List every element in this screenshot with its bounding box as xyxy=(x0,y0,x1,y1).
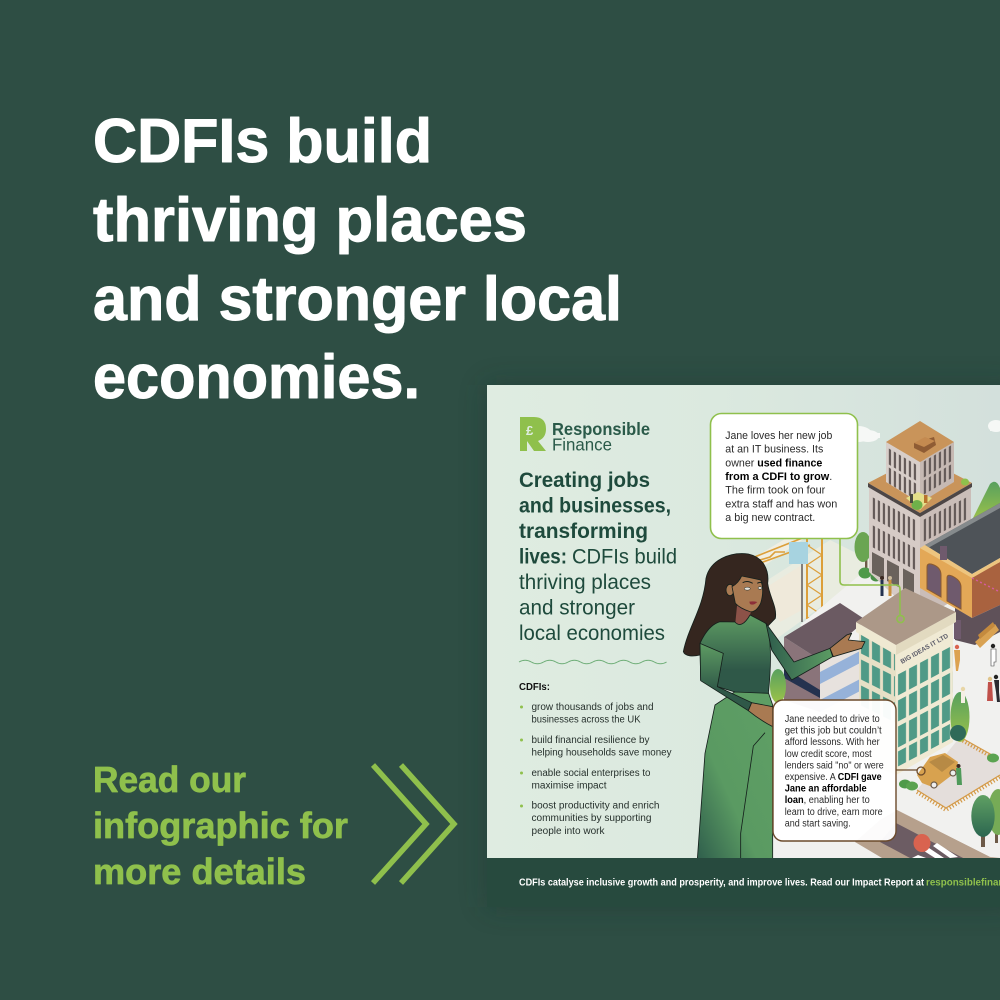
list items xyxy=(532,702,672,837)
terrace xyxy=(868,456,972,513)
list items: enable social enterprises to xyxy=(532,768,651,779)
connector: lower callout to car xyxy=(896,767,925,775)
title: economies. xyxy=(93,343,420,412)
panel heading: and stronger xyxy=(519,596,635,620)
logo pound sign: £ xyxy=(526,423,534,438)
upper block xyxy=(886,442,920,496)
list items: boost productivity and enrich xyxy=(532,800,660,812)
bench xyxy=(975,622,999,648)
panel heading xyxy=(519,469,677,645)
neck and face xyxy=(726,576,763,625)
roof terrace figures xyxy=(906,492,932,510)
callout text: lenders said "no" or were xyxy=(785,760,884,771)
callout text: learn to drive, earn more xyxy=(785,807,883,818)
title: and stronger local xyxy=(93,265,622,334)
wavy divider xyxy=(519,660,667,664)
panel background xyxy=(487,385,1000,858)
logo: Responsible Finance xyxy=(520,417,650,454)
callout text xyxy=(725,430,837,524)
panel heading: Creating jobs xyxy=(519,469,650,492)
list heading: CDFIs: xyxy=(519,682,550,693)
tree left of tower xyxy=(854,532,878,582)
hair xyxy=(683,554,776,656)
top xyxy=(700,615,770,693)
logo: Responsible Finance: Finance xyxy=(552,434,612,454)
callout box xyxy=(710,414,858,538)
callout box xyxy=(773,700,896,841)
connector: top callout to IT building xyxy=(840,539,904,623)
call to action text: Read our xyxy=(93,759,246,800)
footer band xyxy=(487,858,1000,907)
call to action text xyxy=(93,759,348,892)
panel heading: transforming xyxy=(519,520,648,543)
panel heading: lives: xyxy=(519,546,567,568)
road and kerb xyxy=(855,810,1000,862)
title xyxy=(93,107,622,412)
panel heading: CDFIs build xyxy=(572,546,677,568)
skirt fold line xyxy=(741,733,765,859)
callout text: extra staff and has won xyxy=(725,498,837,510)
icon: double chevron arrow xyxy=(373,765,454,883)
hand on hip xyxy=(748,703,773,727)
car with Jane xyxy=(917,753,962,788)
callout text: The firm took on four xyxy=(725,485,826,497)
callout text: Jane needed to drive to xyxy=(785,714,880,725)
lower block xyxy=(869,488,947,606)
callout text: get this job but couldn’t xyxy=(785,726,882,737)
people xyxy=(880,576,1000,703)
callout text xyxy=(785,714,884,829)
callout text: expensive. A CDFI gave xyxy=(785,772,882,783)
title: thriving places xyxy=(93,186,527,255)
illustration: isometric town xyxy=(750,420,1000,862)
crane xyxy=(752,535,822,622)
trees and bushes xyxy=(899,692,1000,847)
parking deck xyxy=(917,737,1000,810)
hand pointing xyxy=(830,633,865,657)
logo mark xyxy=(520,417,546,451)
tower roof xyxy=(886,421,954,462)
callout text: low credit score, most xyxy=(785,749,872,760)
callout text: Jane loves her new job xyxy=(725,430,832,442)
building sign: BIG IDEAS IT LTD xyxy=(900,633,950,666)
callout: Jane's new job xyxy=(710,414,858,538)
lime shrub behind Jane xyxy=(770,669,786,703)
panel shadow xyxy=(487,385,1000,907)
list bullets xyxy=(520,706,523,808)
panel heading: and businesses, xyxy=(519,494,671,518)
panel: infographic preview xyxy=(487,385,1000,907)
list items: build financial resilience by xyxy=(532,735,650,746)
list items: helping households save money xyxy=(532,748,672,758)
orange hall building xyxy=(920,503,1000,645)
illustration: Jane xyxy=(683,554,865,859)
callout text: a big new contract. xyxy=(725,512,815,524)
callout text: loan, enabling her to xyxy=(785,795,870,806)
Big Ideas IT building xyxy=(856,588,956,775)
footer text: CDFIs catalyse inclusive growth and prosperity, and improve lives. Read our Impact Report at xyxy=(519,878,925,888)
text block: CDFIs list xyxy=(519,682,672,837)
list items: people into work xyxy=(532,826,605,837)
list items: communities by supporting xyxy=(532,813,652,824)
call to action text: more details xyxy=(93,851,306,892)
logo wordmark: Responsible xyxy=(552,419,650,439)
clouds xyxy=(844,420,1000,442)
panel heading: local economies xyxy=(519,622,665,645)
tall office tower xyxy=(868,421,972,620)
tree behind tower xyxy=(972,482,1000,520)
skirt xyxy=(697,692,773,859)
title: CDFIs build xyxy=(93,107,432,176)
panel heading: thriving places xyxy=(519,571,651,594)
list items: maximise impact xyxy=(532,780,607,792)
callout text: owner used finance xyxy=(725,457,822,469)
callout text: and start saving. xyxy=(785,818,851,829)
far arm xyxy=(766,623,833,680)
purple building xyxy=(784,603,862,700)
callout text: from a CDFI to grow. xyxy=(725,471,832,483)
list items: grow thousands of jobs and xyxy=(532,702,654,713)
call to action text: infographic for xyxy=(93,805,348,846)
callout text: at an IT business. Its xyxy=(725,444,824,456)
callout: Jane's driving loan xyxy=(773,700,896,841)
callout text: Jane an affordable xyxy=(785,784,867,795)
near arm xyxy=(700,643,752,711)
pale background building xyxy=(757,539,869,638)
plaza ground xyxy=(770,560,1000,858)
list items: businesses across the UK xyxy=(532,715,641,726)
callout text: afford lessons. With her xyxy=(785,737,880,748)
